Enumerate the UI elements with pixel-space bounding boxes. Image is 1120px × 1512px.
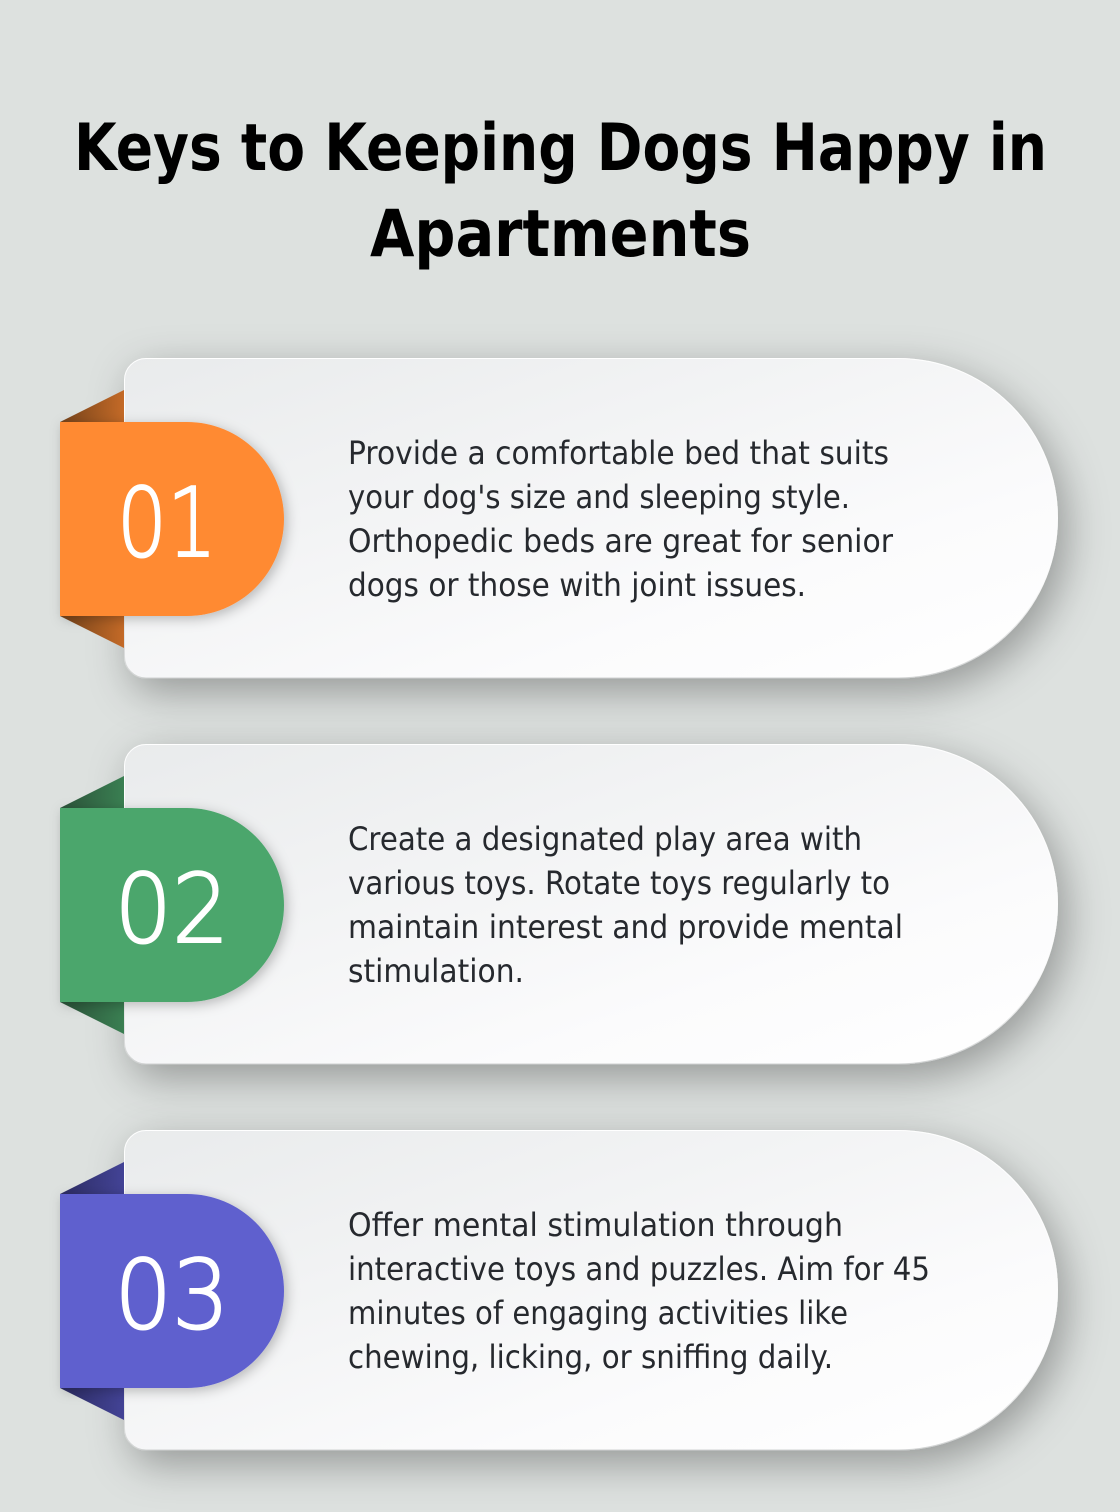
card 01 background [124,358,1057,678]
number tab 01 [60,422,284,616]
text 03: chewing, licking, or sniffing daily. [348,1338,833,1376]
title: Apartments [370,197,751,272]
fold top 01 [60,390,124,422]
text 03: minutes of engaging activities like [348,1294,848,1332]
panel: step 01 bed [60,358,1058,678]
text 01: Orthopedic beds are great for senior [348,522,894,560]
text 03: interactive toys and puzzles. Aim for 45 [348,1250,930,1288]
number 01: 01 [117,469,217,579]
card 03 background [124,1130,1058,1450]
panel: step 02 play area [60,744,1058,1064]
text 01: Provide a comfortable bed that suits [348,434,889,472]
fold bottom 03 [60,1388,124,1420]
text 01: your dog's size and sleeping style. [348,478,850,516]
number tab 03 [60,1194,284,1388]
text 03: Offer mental stimulation through [348,1206,843,1244]
text 02: various toys. Rotate toys regularly to [348,864,890,902]
text 01: dogs or those with joint issues. [348,566,806,604]
number tab 02 [60,808,284,1002]
card 02 background [124,744,1058,1064]
text 03 [348,1206,930,1376]
text 01 [348,434,894,604]
fold bottom 01 [60,616,124,648]
panel: step 03 mental stimulation [60,1130,1058,1450]
fold top 03 [60,1162,124,1194]
number 03: 03 [114,1241,230,1351]
number 02: 02 [114,855,230,965]
text 02: Create a designated play area with [348,820,862,858]
fold top 02 [60,776,124,808]
text 02: maintain interest and provide mental [348,908,903,946]
text 02 [348,820,903,990]
fold bottom 02 [60,1002,124,1034]
title [74,111,1047,272]
text 02: stimulation. [348,952,524,990]
